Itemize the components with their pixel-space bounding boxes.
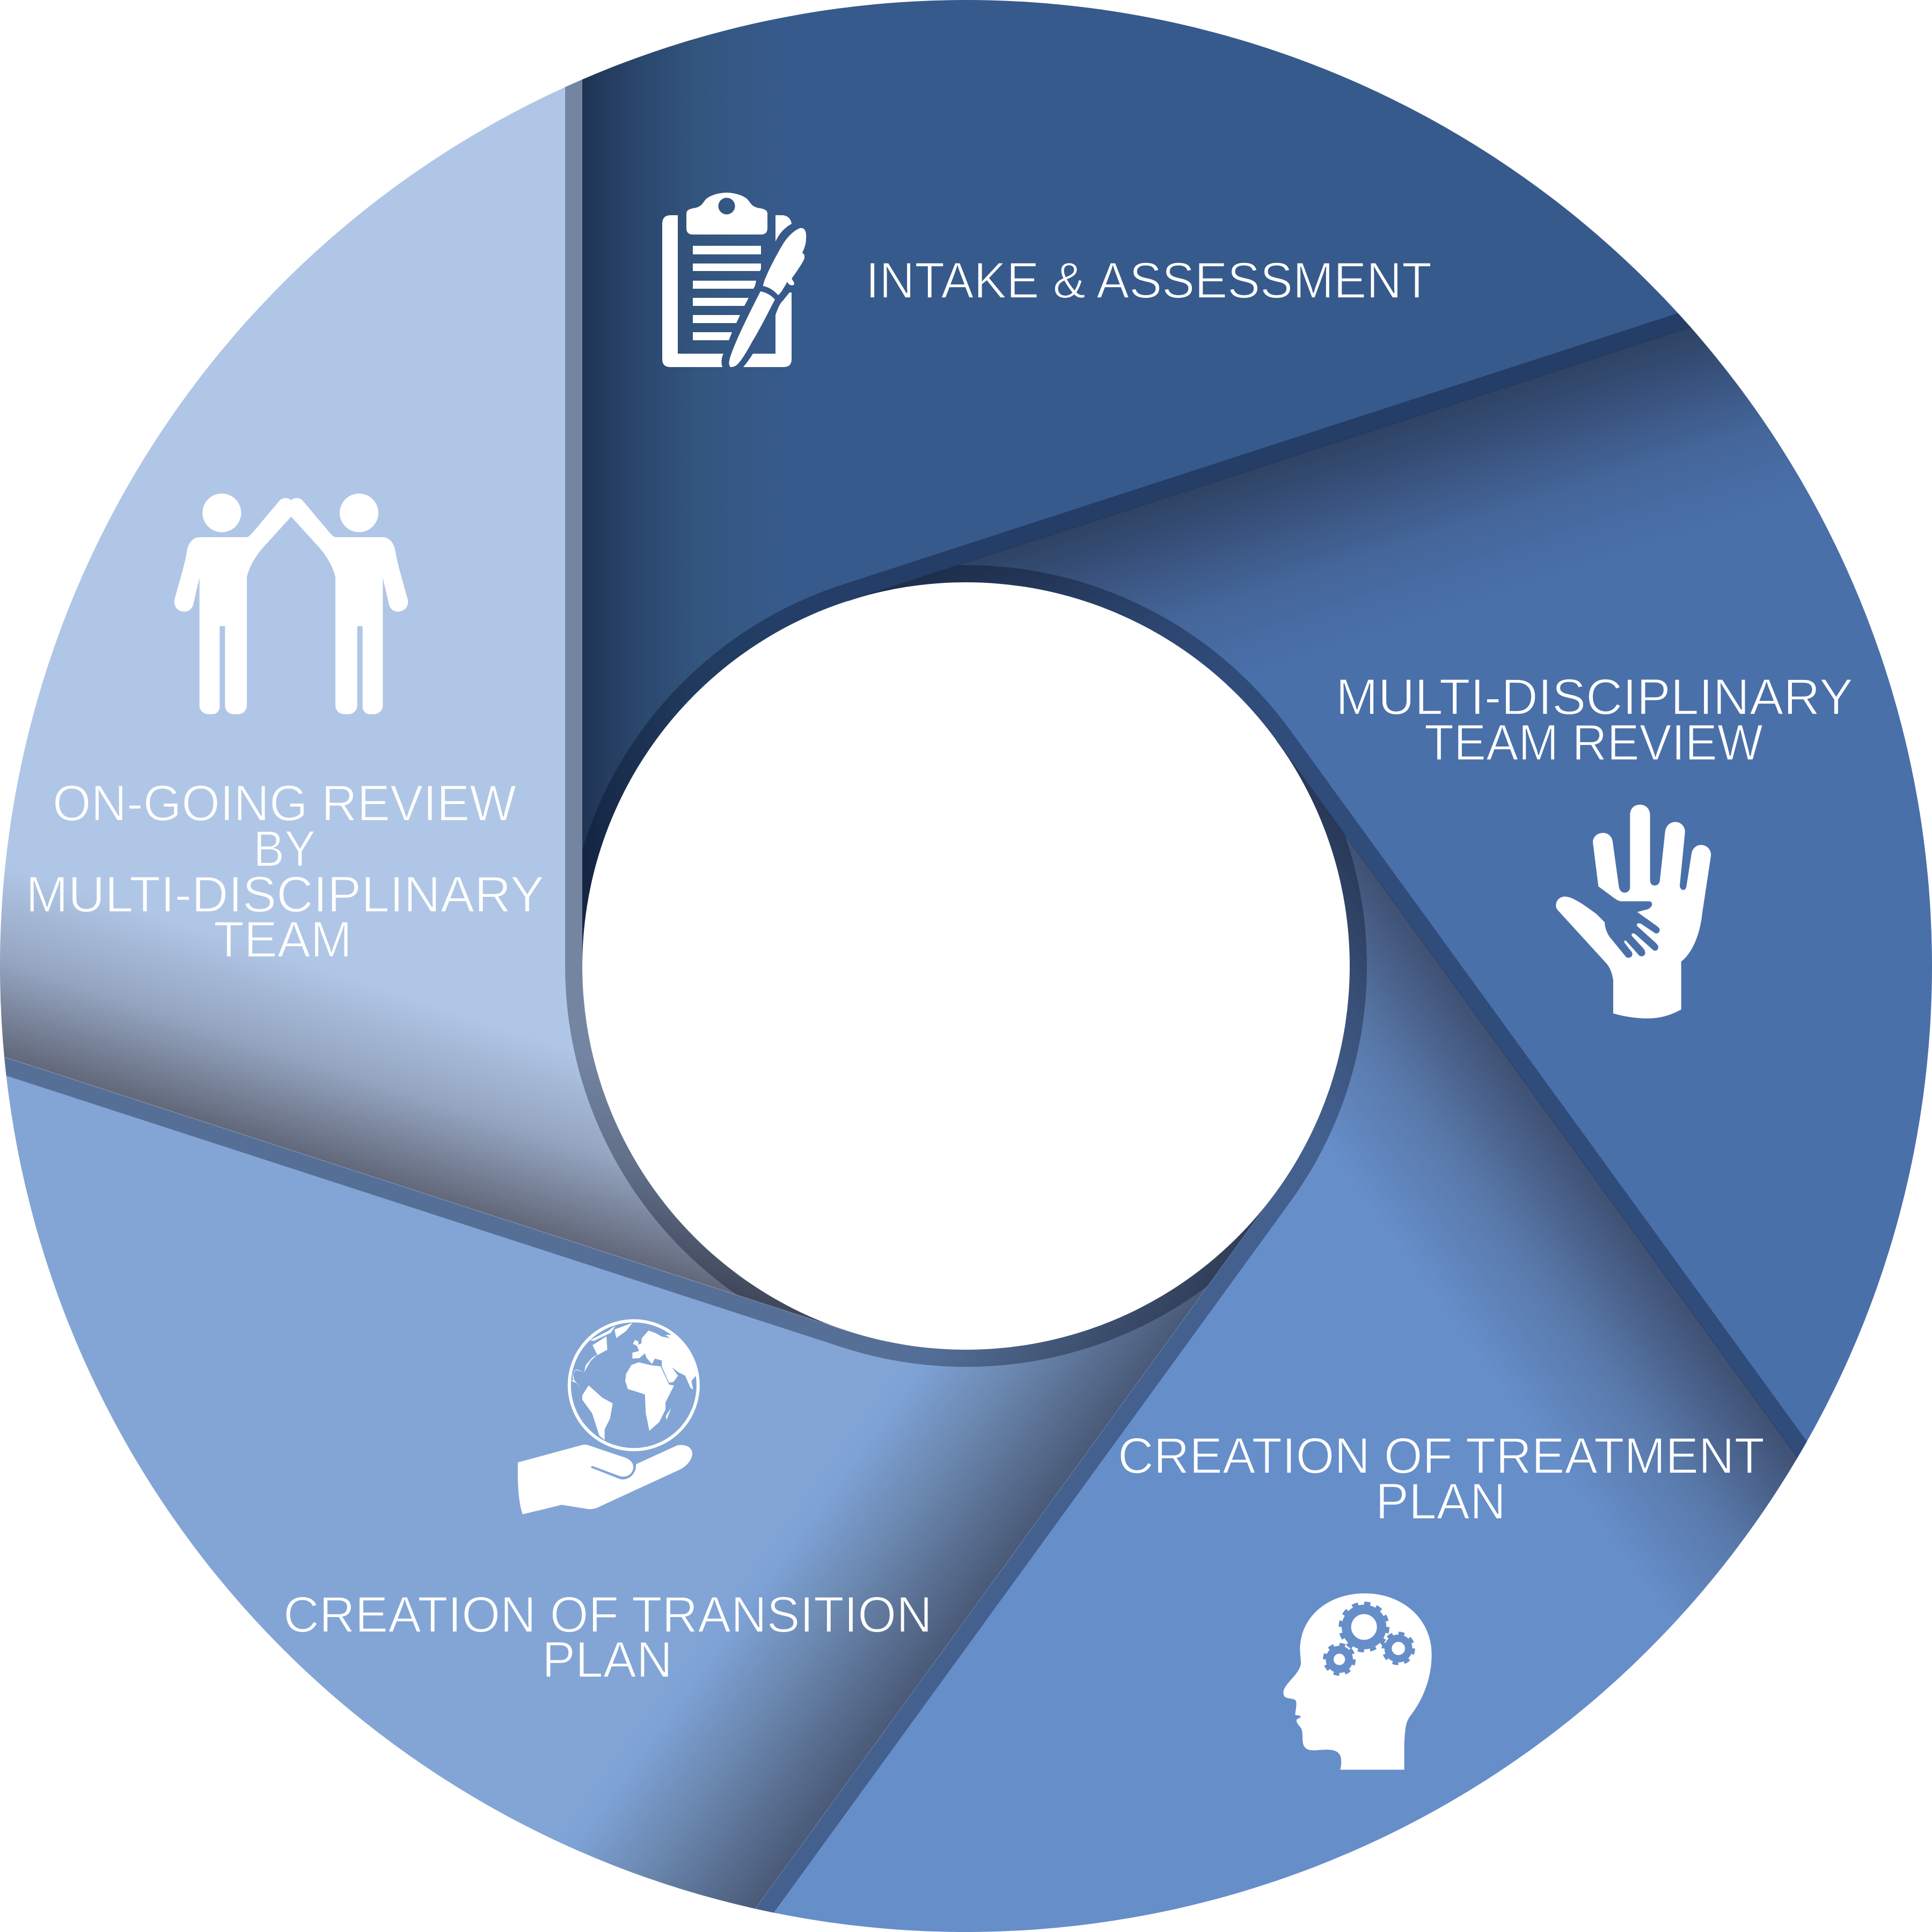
label: on-going review by multi-disciplinary team: ON-GOING REVIEW (53, 775, 516, 832)
label: creation of treatment plan (1118, 1428, 1765, 1530)
label: on-going review by multi-disciplinary team (26, 775, 544, 968)
label: creation of transition plan: CREATION OF TRANSITION (283, 1586, 932, 1643)
label: creation of transition plan: PLAN (542, 1631, 672, 1688)
blade: on-going review (0, 79, 847, 1331)
icon: two people high five (174, 494, 408, 714)
label: intake and assessment: INTAKE & ASSESSMENT (866, 252, 1432, 309)
label: creation of treatment plan: CREATION OF TREATMENT (1118, 1428, 1765, 1484)
blade: intake and assessment (582, 0, 1690, 966)
label: multi-disciplinary team review: TEAM REVIEW (1424, 714, 1763, 771)
icon: adult hand with child hand (1556, 804, 1711, 1019)
blade: creation of treatment plan (755, 741, 1797, 1932)
label: creation of treatment plan: PLAN (1375, 1473, 1506, 1530)
label: on-going review by multi-disciplinary team: MULTI-DISCIPLINARY (26, 866, 544, 923)
hairlines along blade edges (4, 327, 1797, 1909)
blade: multi-disciplinary team review (847, 327, 1932, 1458)
label: creation of transition plan (283, 1586, 932, 1688)
label: multi-disciplinary team review (1336, 669, 1853, 771)
label: multi-disciplinary team review: MULTI-DISCIPLINARY (1336, 669, 1853, 726)
icon: clipboard and pen (662, 193, 806, 367)
label: on-going review by multi-disciplinary team: TEAM (214, 911, 352, 968)
label: on-going review by multi-disciplinary team: BY (253, 821, 316, 877)
icon: head with gears (1283, 1593, 1432, 1770)
icon: globe held in hand (518, 1321, 698, 1514)
blade: creation of transition plan (4, 1057, 1276, 1909)
